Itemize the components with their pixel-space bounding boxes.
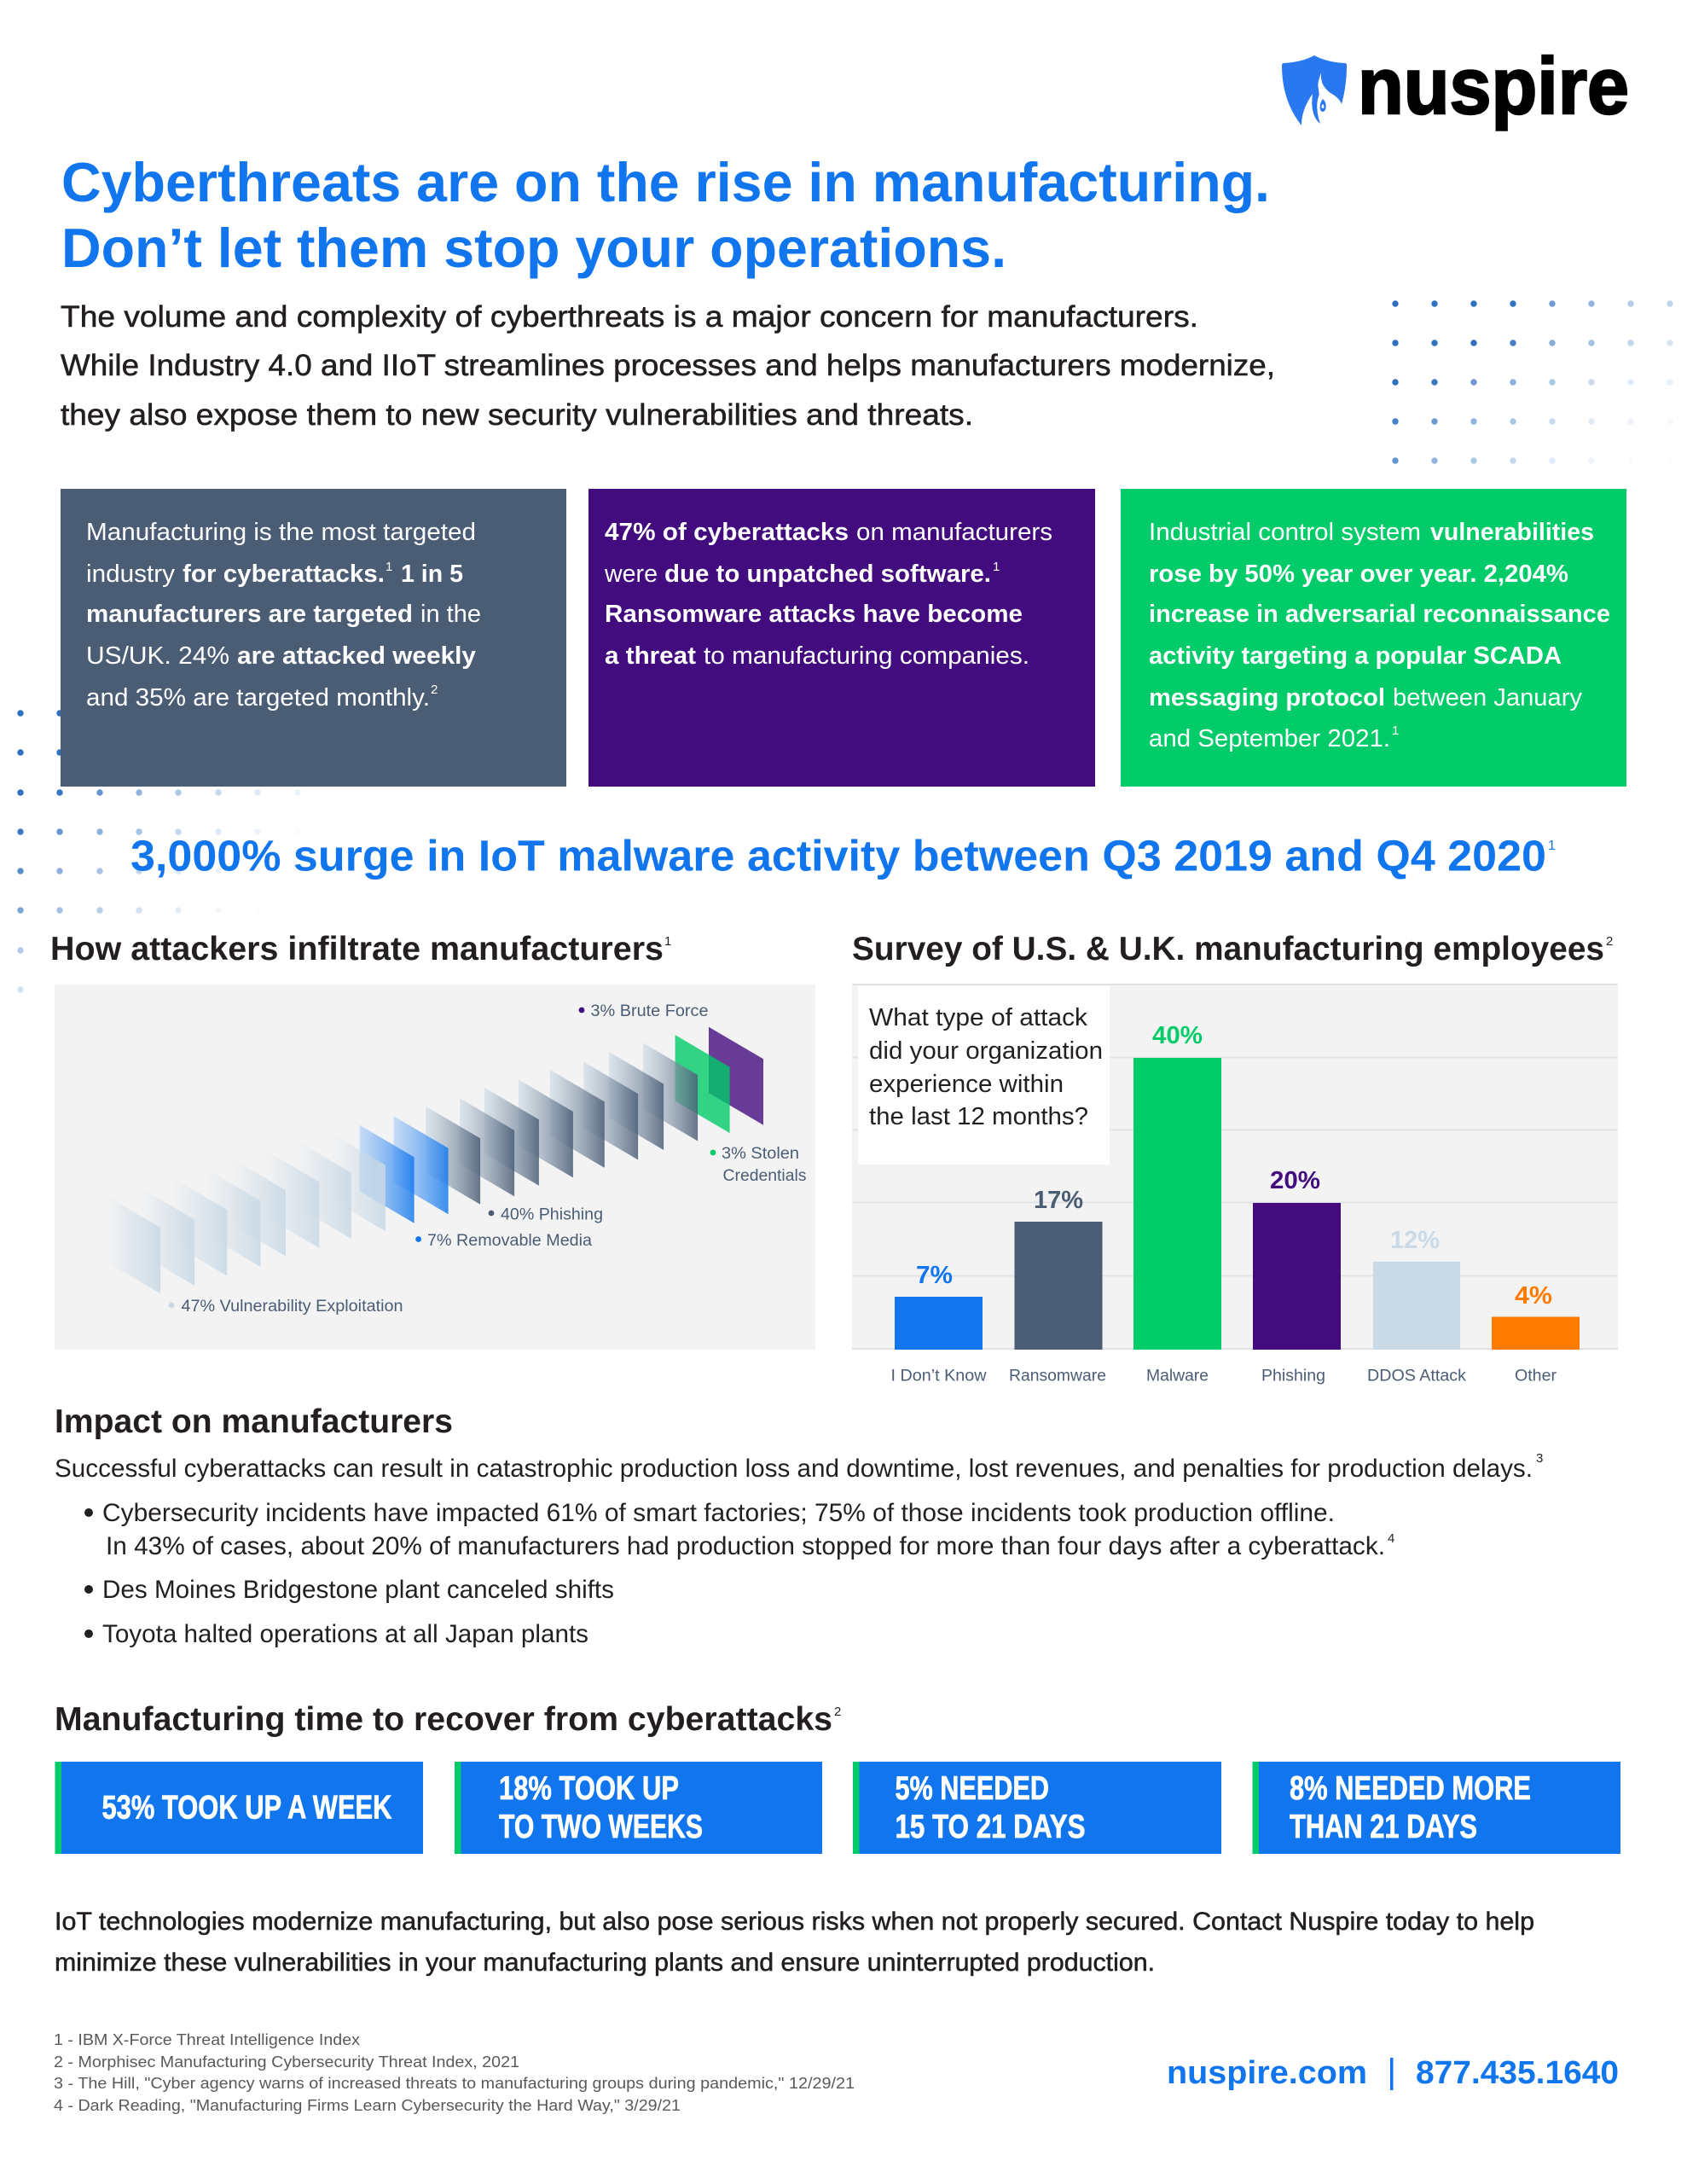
bar: DDOS attack 12%: DDOS Attack (1367, 1367, 1467, 1385)
panel: most targeted industry: are attacked weekly (237, 642, 476, 670)
bar: ransomware 17% (1009, 1187, 1106, 1385)
card: 8% needed more than 21 days (1252, 1762, 1620, 1854)
title: Cyberthreats are on the rise in manufacturing. (61, 151, 1270, 213)
label: stolen credentials: 3% Stolen (722, 1145, 799, 1163)
callout: survey question: did your organization (869, 1037, 1103, 1065)
bar: DDOS attack 12%: 12% (1390, 1227, 1440, 1254)
bar: ransomware 17%: Ransomware (1009, 1367, 1106, 1385)
footnotes (54, 2030, 855, 2114)
bullet list: impacts (84, 1499, 1394, 1648)
bar: phishing 20%: Phishing (1261, 1367, 1325, 1385)
footnotes: 4 - Dark Reading, "Manufacturing Firms Learn Cybersecurity the Hard Way," 3/29/21 (54, 2096, 681, 2114)
panel: most targeted industry: 1 (386, 560, 392, 574)
panel: industrial control vulnerabilities: increase in adversarial reconnaissance (1149, 601, 1610, 628)
bar: other 4%: Other (1515, 1367, 1557, 1385)
layered attack planes (106, 1027, 763, 1293)
intro text block (61, 300, 1275, 432)
logo wordmark: nuspire (1358, 41, 1629, 131)
card: 18% took up to two weeks: 18% TOOK UP (499, 1770, 679, 1807)
panel: most targeted industry: in the (420, 601, 481, 628)
bar: I don't know 7%: 7% (916, 1262, 953, 1289)
bullet list: impacts: In 43% of cases, about 20% of manufacturers had production stopped for more than four days after a cyberattack. (106, 1532, 1385, 1560)
panel: unpatched software: a threat (605, 642, 697, 670)
panel: most targeted industry: for cyberattacks. (183, 561, 385, 588)
card: 8% needed more than 21 days: 8% NEEDED MORE (1290, 1770, 1531, 1807)
heading: survey: 2 (1606, 934, 1613, 949)
callout: survey question (858, 986, 1110, 1165)
panel: industrial control vulnerabilities: Industrial control system (1149, 519, 1421, 546)
label: stolen credentials: Credentials (723, 1167, 807, 1185)
closing text block (55, 1908, 1534, 1977)
bar: other 4%: 4% (1515, 1282, 1552, 1310)
decorative dot grid: top right (1392, 300, 1673, 464)
heading: impact on manufacturers: Impact on manufacturers (55, 1403, 453, 1440)
card: 5% needed 15 to 21 days (853, 1762, 1221, 1854)
panel: unpatched software: 47% of cyberattacks (605, 519, 849, 546)
stat headline: 1 (1548, 839, 1556, 853)
bar: I don't know 7% (890, 1262, 987, 1385)
panel: most targeted industry: Manufacturing is the most targeted (86, 519, 476, 546)
bar: malware 40%: 40% (1152, 1022, 1203, 1049)
text block: impact summary: 3 (1536, 1451, 1543, 1466)
footnotes: 2 - Morphisec Manufacturing Cybersecurity Threat Index, 2021 (54, 2053, 519, 2071)
bullet list: impacts: 4 (1388, 1531, 1394, 1546)
panel: unpatched software: were (604, 561, 658, 588)
heading: time to recover: Manufacturing time to recover from cyberattacks (55, 1701, 832, 1738)
title (61, 151, 1270, 279)
footnotes: 3 - The Hill, "Cyber agency warns of increased threats to manufacturing groups during pandemic," 12/29/21 (54, 2074, 855, 2092)
panel: most targeted industry: and 35% are targeted monthly. (86, 684, 430, 712)
panel: most targeted industry: manufacturers are targeted (86, 601, 413, 628)
heading: how attackers infiltrate: 1 (664, 934, 671, 949)
heading: survey: Survey of U.S. & U.K. manufacturing employees (852, 931, 1604, 967)
card: 5% needed 15 to 21 days: 5% NEEDED (896, 1770, 1049, 1807)
intro text block: they also expose them to new security vulnerabilities and threats. (61, 398, 973, 432)
panel: industrial control vulnerabilities: activity targeting a popular SCADA (1149, 642, 1562, 670)
panel: most targeted industry: 1 in 5 (401, 561, 463, 588)
panel: most targeted industry: industry (86, 561, 176, 588)
icon: shield with flame (1282, 55, 1347, 125)
bar: phishing 20% (1253, 1167, 1341, 1385)
heading: how attackers infiltrate: How attackers infiltrate manufacturers (50, 931, 664, 967)
panel: unpatched software (588, 489, 1095, 787)
label: removable media: 7% Removable Media (427, 1232, 592, 1250)
text block: impact summary: Successful cyberattacks can result in catastrophic production loss and downtime, lost revenues, and penalties for production delays. (55, 1455, 1533, 1483)
contact line: 877.435.1640 (1416, 2055, 1619, 2091)
bar: malware 40%: Malware (1146, 1367, 1209, 1385)
bullet list: impacts: Des Moines Bridgestone plant canceled shifts (102, 1576, 614, 1604)
panel: unpatched software: Ransomware attacks have become (605, 601, 1023, 628)
contact line (1167, 2055, 1619, 2091)
panel: industrial control vulnerabilities: and September 2021. (1149, 725, 1390, 752)
card: 5% needed 15 to 21 days: 15 TO 21 DAYS (896, 1809, 1085, 1845)
bar: other 4% (1492, 1282, 1580, 1385)
bullet list: impacts: Toyota halted operations at all Japan plants (102, 1620, 588, 1648)
label: stolen credentials (710, 1145, 807, 1185)
callout: survey question: the last 12 months? (869, 1103, 1088, 1130)
panel: attack chain diagram (55, 985, 815, 1350)
callout: survey question: experience within (869, 1071, 1064, 1098)
card: 18% took up to two weeks (455, 1762, 822, 1854)
closing text block: minimize these vulnerabilities in your manufacturing plants and ensure uninterrupted production. (55, 1949, 1155, 1977)
panel: unpatched software: on manufacturers (856, 519, 1052, 546)
panel: industrial control vulnerabilities: rose by 50% year over year. 2,204% (1149, 561, 1568, 588)
logo: nuspire (1282, 41, 1629, 131)
panel: unpatched software: due to unpatched software. (664, 561, 991, 588)
bullet list: impacts: Cybersecurity incidents have impacted 61% of smart factories; 75% of those incidents took production offline. (102, 1499, 1335, 1527)
decorative dot grid: left (17, 710, 301, 993)
bar: I don't know 7%: I Don’t Know (890, 1367, 987, 1385)
heading: time to recover: 2 (834, 1705, 841, 1719)
card: 53% took up a week (55, 1762, 423, 1854)
panel: industrial control vulnerabilities: 1 (1392, 723, 1399, 738)
stat headline: 3,000% surge in IoT malware activity between Q3 2019 and Q4 2020 (130, 831, 1546, 880)
panel: industrial control vulnerabilities: between January (1393, 684, 1583, 712)
panel: unpatched software: 1 (993, 560, 1000, 574)
card: 53% took up a week: 53% TOOK UP A WEEK (102, 1790, 392, 1826)
title: Don’t let them stop your operations. (61, 217, 1006, 279)
panel: unpatched software: to manufacturing companies. (704, 642, 1029, 670)
label: phishing: 40% Phishing (501, 1206, 603, 1223)
bar: DDOS attack 12% (1367, 1227, 1467, 1385)
label: vulnerability exploitation: 47% Vulnerability Exploitation (181, 1298, 403, 1316)
panel: industrial control vulnerabilities (1121, 489, 1626, 787)
label: brute force: 3% Brute Force (590, 1002, 708, 1020)
panel: most targeted industry: US/UK. 24% (86, 642, 229, 670)
intro text block: The volume and complexity of cyberthreats is a major concern for manufacturers. (61, 300, 1198, 334)
callout: survey question: What type of attack (869, 1004, 1088, 1031)
bar: ransomware 17%: 17% (1034, 1187, 1083, 1214)
bar: malware 40% (1133, 1022, 1221, 1385)
bar chart: attack types (852, 985, 1618, 1385)
card: 8% needed more than 21 days: THAN 21 DAYS (1290, 1809, 1477, 1845)
panel: most targeted industry (61, 489, 566, 787)
intro text block: While Industry 4.0 and IIoT streamlines processes and helps manufacturers modernize, (61, 349, 1275, 382)
panel: most targeted industry: 2 (431, 682, 438, 697)
panel: industrial control vulnerabilities: vulnerabilities (1430, 519, 1594, 546)
closing text block: IoT technologies modernize manufacturing, but also pose serious risks when not properly secured. Contact Nuspire today to help (55, 1908, 1534, 1936)
footnotes: 1 - IBM X-Force Threat Intelligence Index (54, 2030, 361, 2048)
bar: phishing 20%: 20% (1270, 1167, 1320, 1194)
card: 18% took up to two weeks: TO TWO WEEKS (499, 1809, 703, 1845)
contact line: nuspire.com (1167, 2055, 1367, 2091)
panel: industrial control vulnerabilities: messaging protocol (1149, 684, 1385, 712)
